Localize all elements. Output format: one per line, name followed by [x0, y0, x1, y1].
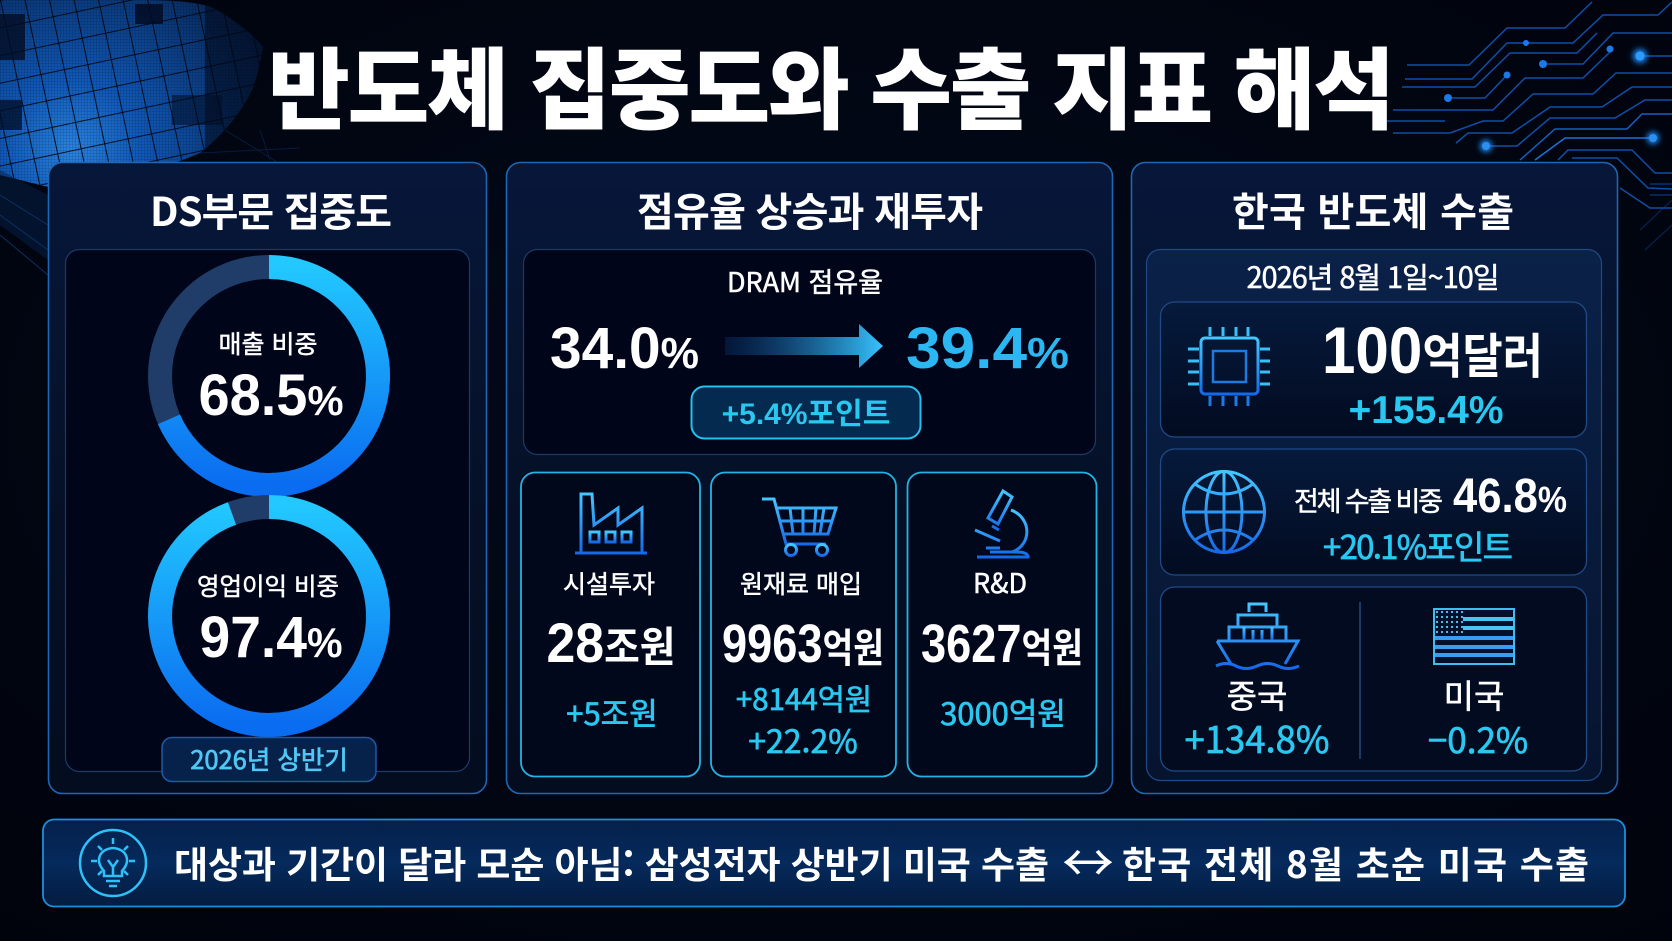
change amount: +8144억원 [736, 677, 872, 719]
inner box [1146, 250, 1602, 780]
heading: 점유율 상승과 재투자 [637, 180, 983, 238]
value: 100억달러 [1322, 313, 1543, 387]
circuit lines [1387, 2, 1672, 250]
label: 영업이익 비중 [197, 568, 339, 603]
value: 46.8% [1453, 470, 1567, 523]
change rate: +22.2% [748, 717, 858, 763]
card: 전체 수출 비중 [1160, 449, 1586, 575]
wafer illustration [0, 0, 300, 275]
panel: 한국 반도체 수출 [1132, 162, 1618, 794]
card: 중국 미국 [1160, 587, 1586, 771]
amount: 3000억원 [940, 689, 1066, 734]
donut: 영업이익 비중 [160, 507, 378, 725]
panel: DS부문 집중도 [48, 162, 486, 794]
label: 매출 비중 [218, 325, 318, 361]
divider [1359, 602, 1361, 759]
heading: DS부문 집중도 [150, 180, 392, 238]
value: 68.5% [198, 363, 344, 428]
value: 9963억원 [722, 614, 884, 674]
icon: ship [1216, 604, 1299, 668]
change: +5조원 [566, 689, 658, 734]
value: −0.2% [1428, 713, 1528, 764]
icon: cart [762, 499, 836, 556]
from value: 34.0% [550, 316, 699, 381]
to value: 39.4% [906, 316, 1069, 381]
label: R&D [973, 562, 1027, 601]
label: 중국 [1227, 670, 1287, 718]
callout text: 한국 전체 8월 초순 미국 수출 [1122, 835, 1589, 889]
circuit nodes [1444, 40, 1659, 152]
value: 28조원 [546, 611, 676, 675]
icon: globe [1184, 471, 1265, 553]
label: 전체 수출 비중 [1294, 480, 1443, 519]
icon: microscope [975, 491, 1028, 557]
title: 반도체 집중도와 수출 지표 해석 [268, 19, 1395, 148]
period tag [162, 738, 376, 782]
callout text: 대상과 기간이 달라 모순 아님: 삼성전자 상반기 미국 수출 [174, 835, 1049, 889]
value: 97.4% [200, 605, 342, 670]
icon: chip [1188, 327, 1270, 406]
period: 2026년 8월 1일~10일 [1246, 255, 1500, 297]
label: 원재료 매입 [740, 565, 862, 601]
label: 미국 [1444, 670, 1504, 718]
label: DRAM 점유율 [727, 261, 883, 300]
value: +134.8% [1184, 711, 1330, 764]
callout text [174, 822, 1589, 897]
icon: US flag [1434, 609, 1514, 664]
card: 원재료 매입 [711, 472, 896, 776]
card: 시설투자 [521, 472, 700, 776]
label: 시설투자 [563, 565, 655, 601]
value: 3627억원 [921, 614, 1083, 674]
icon: light bulb [80, 830, 146, 896]
inner box [66, 250, 470, 772]
card: 수출액 [1160, 302, 1586, 437]
icon: factory [575, 494, 647, 553]
period tag: 2026년 상반기 [190, 740, 348, 777]
panel: 점유율 상승과 재투자 [506, 162, 1112, 794]
change: +20.1%포인트 [1323, 521, 1513, 569]
heading: 한국 반도체 수출 [1232, 180, 1514, 238]
callout text: ↔ [1062, 822, 1114, 897]
change badge [692, 386, 920, 438]
DRAM share box [524, 250, 1096, 454]
donut: 매출 비중 [160, 267, 378, 485]
card: R&D [908, 472, 1096, 776]
footer callout [43, 820, 1625, 906]
change: +155.4% [1348, 389, 1504, 432]
change badge: +5.4%포인트 [722, 398, 890, 431]
arrow [725, 324, 883, 368]
